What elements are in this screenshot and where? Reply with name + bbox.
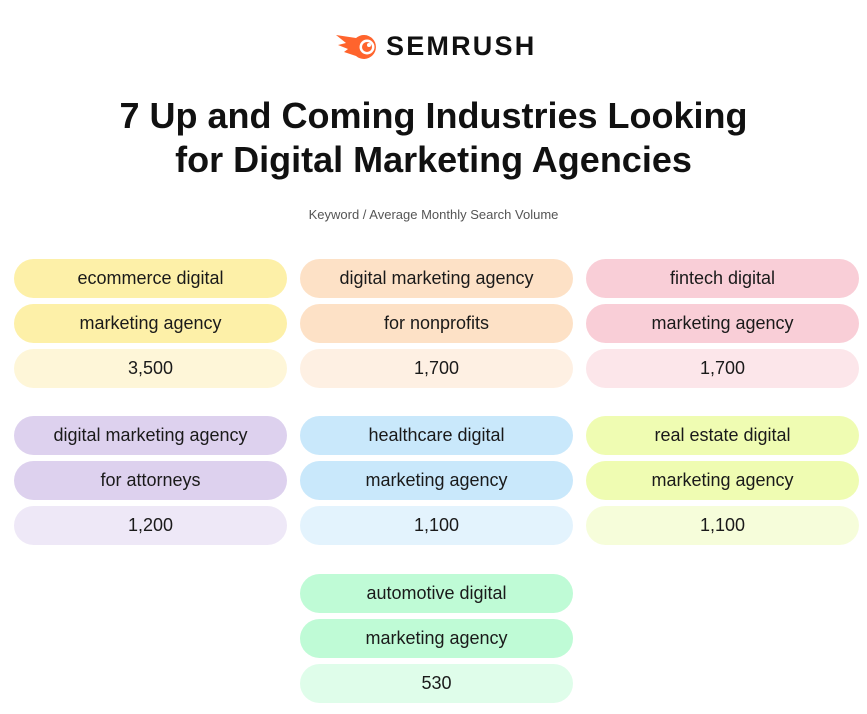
title: for Digital Marketing Agencies [175,139,692,180]
card: real estate [586,416,859,545]
card: ecommerce: ecommerce digital [77,268,224,288]
card: fintech: marketing agency [651,313,794,333]
card: fintech: 1,700 [700,358,745,378]
card: automotive [300,574,573,703]
card: attorneys: for attorneys [100,470,201,490]
card: automotive: marketing agency [365,628,508,648]
card: nonprofits: 1,700 [414,358,459,378]
card: attorneys [14,416,287,545]
card: attorneys: digital marketing agency [53,425,248,445]
card: nonprofits: digital marketing agency [339,268,534,288]
card: automotive: automotive digital [366,583,507,603]
card: fintech: fintech digital [670,268,775,288]
card: healthcare: 1,100 [414,515,459,535]
card: real estate: 1,100 [700,515,745,535]
card: attorneys: 1,200 [128,515,173,535]
card: fintech [586,259,859,388]
card: ecommerce [14,259,287,388]
card: real estate: real estate digital [654,425,791,445]
card: real estate: marketing agency [651,470,794,490]
card: automotive: 530 [421,673,452,693]
card: ecommerce: 3,500 [128,358,173,378]
card: healthcare: healthcare digital [368,425,505,445]
title: 7 Up and Coming Industries Looking [119,95,748,136]
subtitle: Keyword / Average Monthly Search Volume [309,207,558,222]
brand name: SEMRUSH [386,31,536,61]
card: healthcare [300,416,573,545]
logo [336,31,536,61]
card: nonprofits [300,259,573,388]
card: nonprofits: for nonprofits [384,313,489,333]
icon: semrush flame [336,35,376,59]
title [119,95,748,180]
card: healthcare: marketing agency [365,470,508,490]
card: ecommerce: marketing agency [79,313,222,333]
